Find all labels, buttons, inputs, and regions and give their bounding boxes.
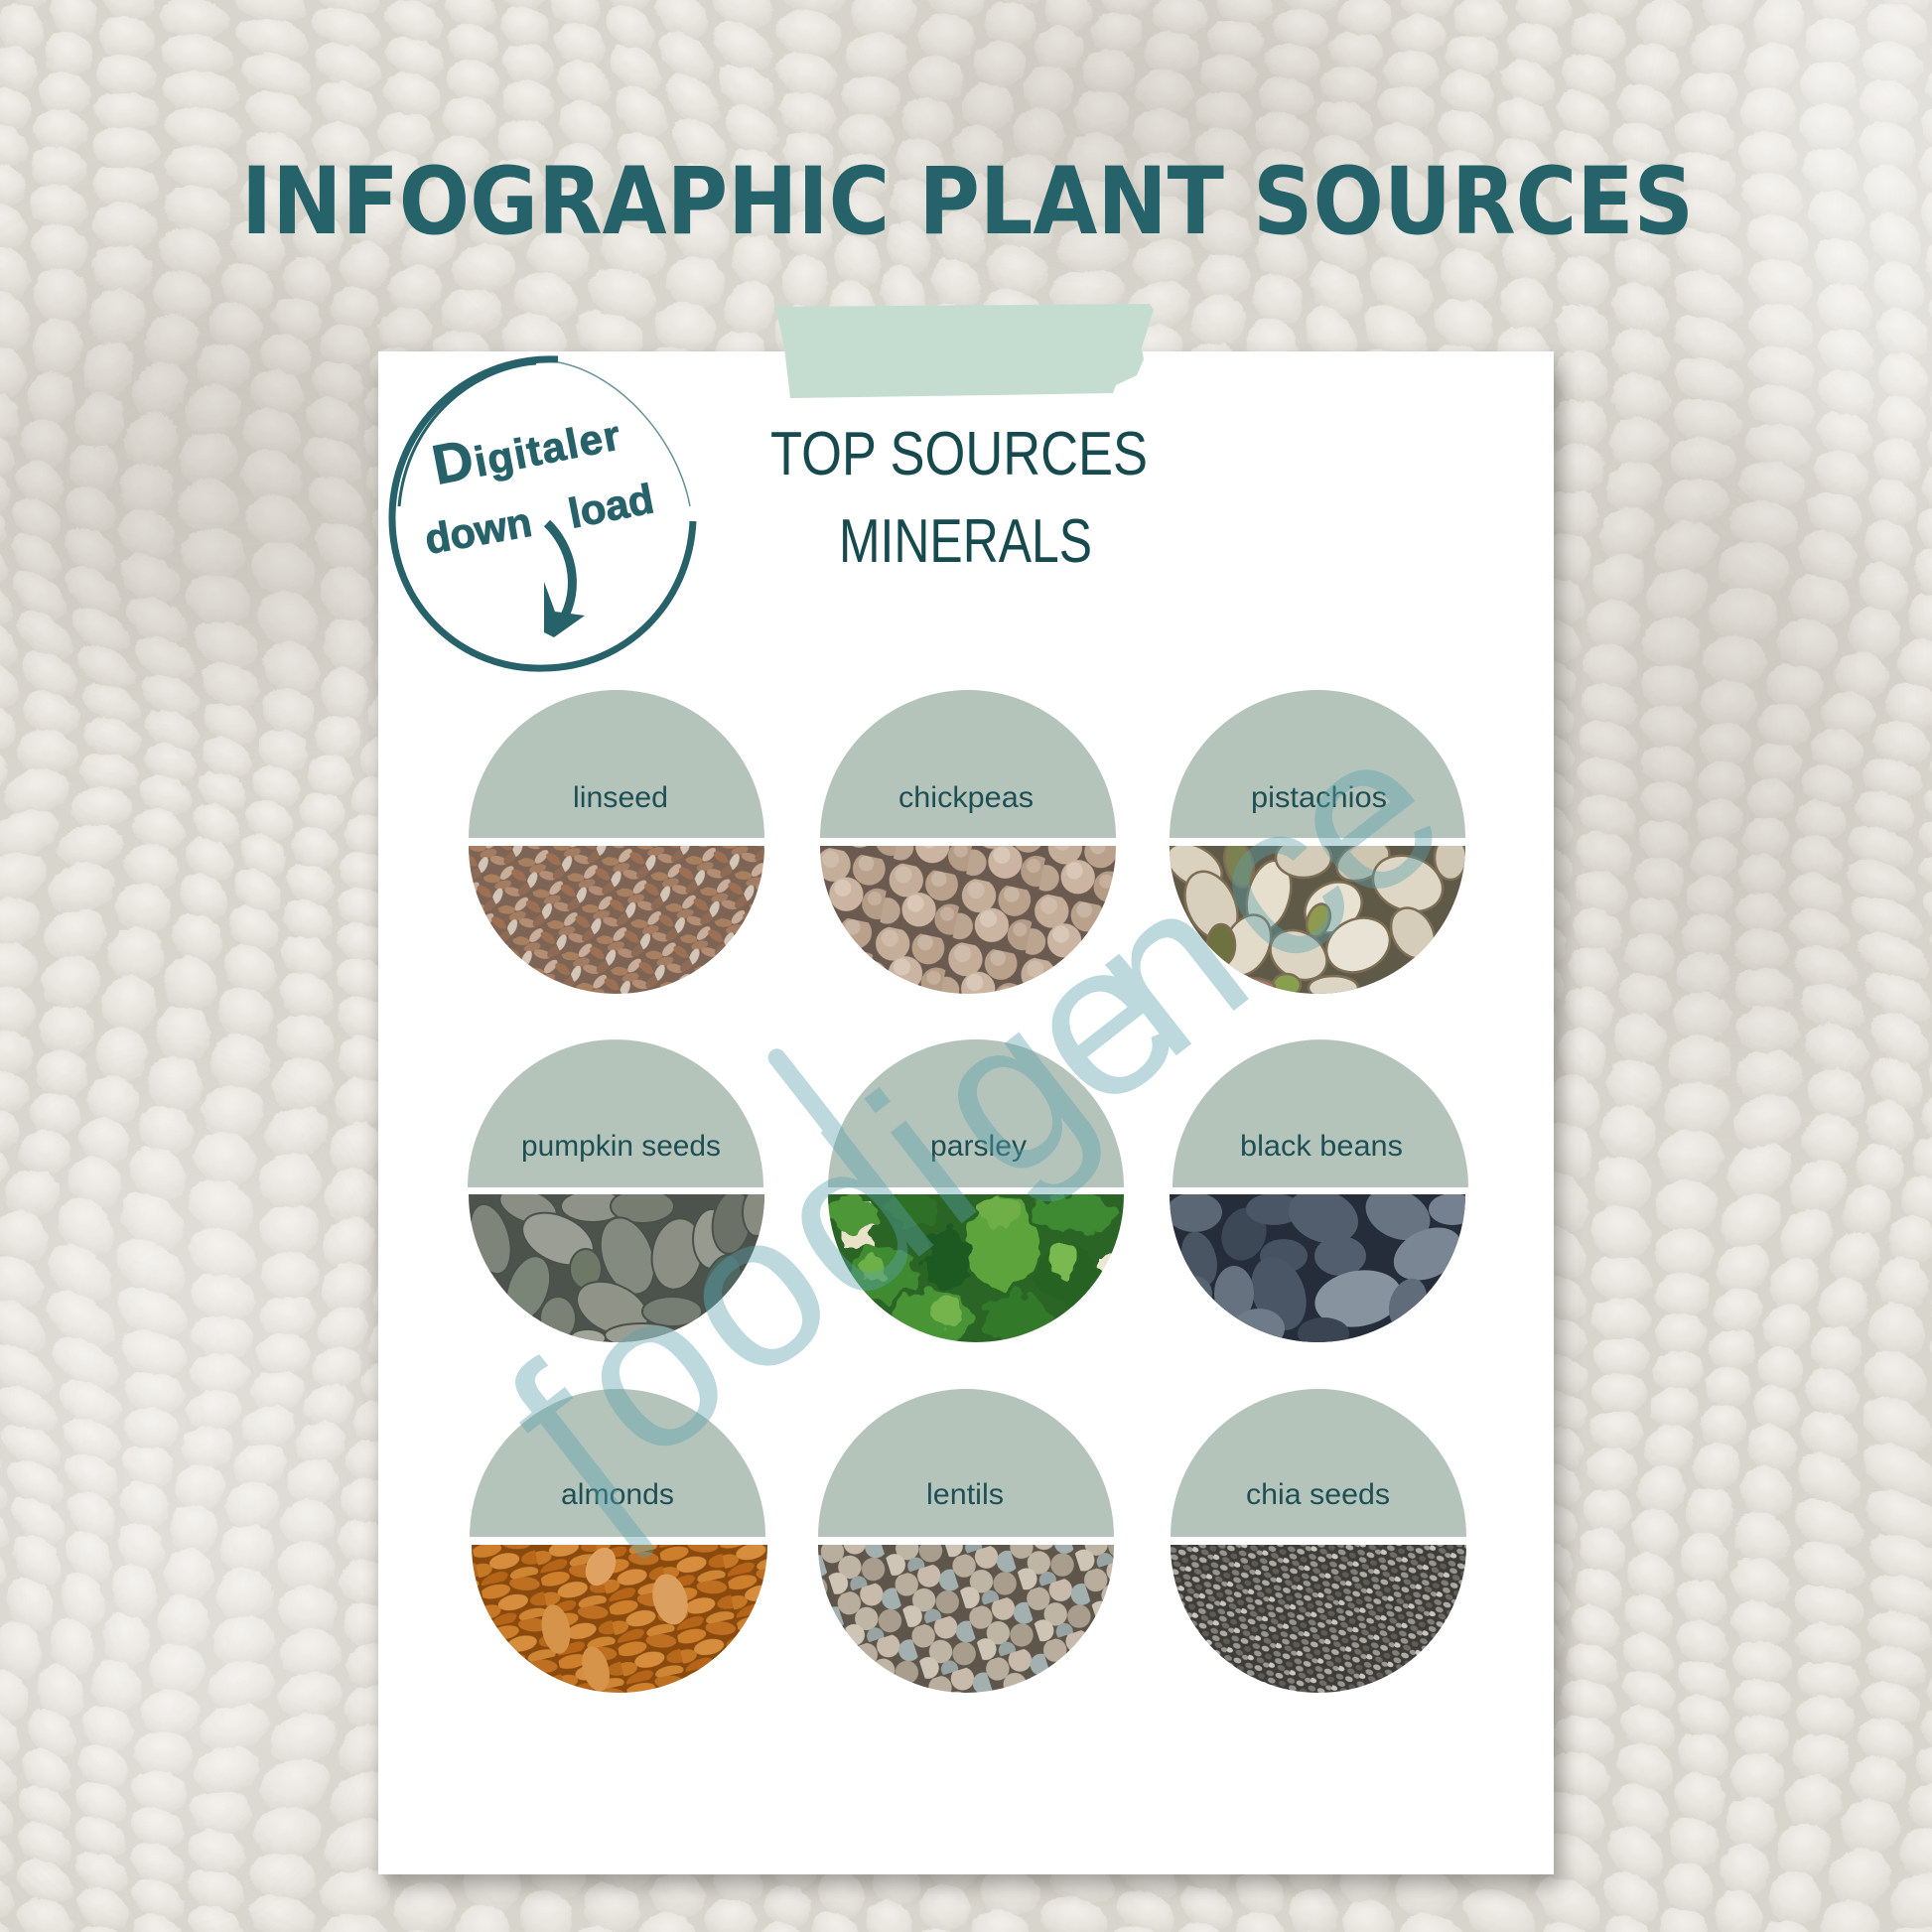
photo: almonds xyxy=(472,1543,767,1695)
card: black beans xyxy=(1167,1039,1476,1349)
card: linseed: linseed xyxy=(573,781,668,814)
paper shadow xyxy=(383,363,1561,1884)
card: black beans: black beans xyxy=(1240,1130,1403,1163)
card: lentils xyxy=(818,1389,1114,1694)
card: almonds xyxy=(470,1389,767,1695)
card: parsley xyxy=(818,1039,1134,1353)
card: chickpeas xyxy=(820,690,1116,995)
badge ring xyxy=(392,359,693,668)
card: linseed xyxy=(469,690,764,995)
card: chia seeds xyxy=(1171,1389,1466,1694)
photo: pistachios xyxy=(1170,846,1465,994)
badge text: load: load xyxy=(565,475,657,537)
card: pumpkin seeds xyxy=(463,1039,770,1347)
badge text: Digitaler: Digitaler xyxy=(427,399,624,496)
photo: linseed xyxy=(469,846,764,995)
paper sheet xyxy=(378,351,1554,1874)
card: lentils: lentils xyxy=(926,1478,1004,1511)
heading: minerals: MINERALS xyxy=(839,507,1092,576)
card: chickpeas: chickpeas xyxy=(898,781,1034,814)
card: pumpkin seeds: pumpkin seeds xyxy=(521,1130,721,1163)
card: parsley: parsley xyxy=(930,1130,1027,1163)
photo: black beans xyxy=(1167,1178,1476,1349)
washi tape xyxy=(775,304,1154,398)
card: chia seeds: chia seeds xyxy=(1246,1478,1390,1511)
photo: chia seeds xyxy=(1171,1545,1466,1694)
watermark: foodigence: foodigence xyxy=(467,682,1484,1552)
heading: top sources: TOP SOURCES xyxy=(770,420,1148,488)
card: pistachios xyxy=(1160,690,1466,1000)
photo: parsley xyxy=(818,1184,1134,1353)
card: almonds: almonds xyxy=(561,1478,674,1511)
icon: download arrow xyxy=(544,523,585,637)
photo: chickpeas xyxy=(820,846,1116,995)
photo: lentils xyxy=(818,1545,1114,1694)
title: INFOGRAPHIC PLANT SOURCES xyxy=(241,148,1694,256)
badge: digital download xyxy=(392,359,693,668)
card: pistachios: pistachios xyxy=(1251,781,1387,814)
photo: pumpkin seeds xyxy=(463,1181,770,1347)
badge text: down: down xyxy=(421,498,535,563)
